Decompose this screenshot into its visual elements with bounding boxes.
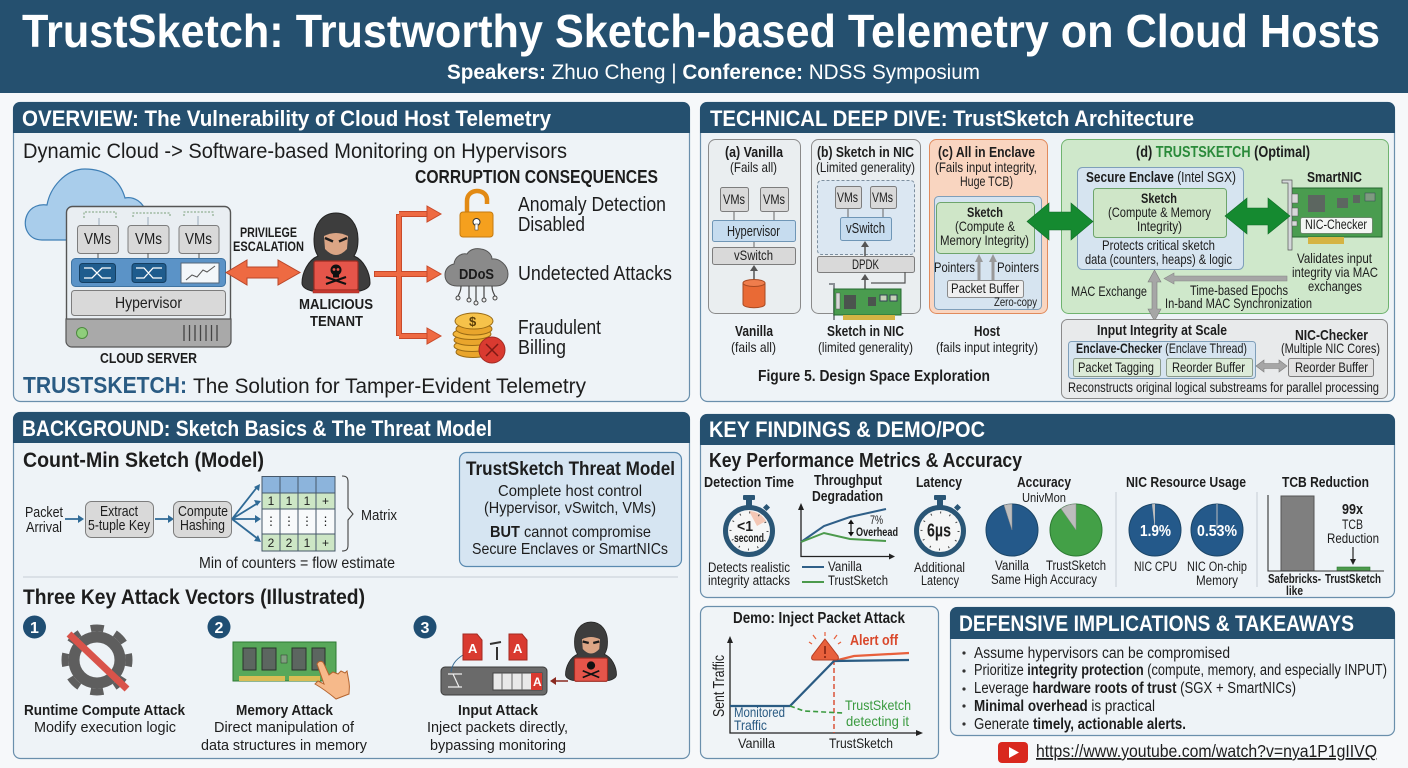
icon: stopwatch: <1 [737, 518, 753, 535]
panel: demo [700, 606, 938, 758]
icon: alert triangle [809, 632, 841, 660]
design (b) sketch in NIC: VMs [872, 190, 893, 205]
icon: packet injection [441, 634, 568, 695]
icon: youtube play [998, 742, 1028, 763]
text: solution statement [23, 372, 586, 398]
icon: DDoS cloud [445, 249, 508, 305]
flow diagram: count-min sketch [25, 484, 261, 542]
labels: MAC exchange and epochs [1071, 282, 1312, 311]
matrix: ⋮ [283, 514, 295, 528]
input integrity at scale: Reorder Buffer [1172, 359, 1245, 375]
line chart: sent traffic: Vanilla [738, 735, 775, 751]
label: privilege escalation: ESCALATION [233, 239, 304, 254]
figure caption: Figure 5. Design Space Exploration [758, 368, 990, 385]
flow diagram: count-min sketch: Extract [100, 503, 139, 520]
secure enclave: data (counters, heaps) & logic [1085, 251, 1232, 267]
matrix: 2 [268, 536, 275, 550]
design (c) all in enclave: (c) All in Enclave [938, 144, 1035, 161]
icon: stopwatch: second [734, 533, 764, 545]
design (c) all in enclave: Zero-copy [994, 295, 1037, 309]
line chart: 7% [870, 513, 883, 527]
callout: threat model: TrustSketch Threat Model [466, 459, 675, 480]
bullet list [962, 645, 1387, 733]
matrix: ⋮ [301, 514, 313, 528]
metric: detection time: integrity attacks [708, 573, 790, 588]
input integrity at scale: (Multiple NIC Cores) [1281, 340, 1380, 356]
metric: latency: Latency [921, 573, 959, 588]
secure enclave: (Compute & Memory [1108, 204, 1211, 220]
bullet list: Leverage hardware roots of trust (SGX + SmartNICs) [974, 680, 1296, 697]
design (a) vanilla: VMs [723, 191, 745, 207]
arrow: epoch sync [1164, 273, 1287, 284]
callout: threat model: Secure Enclaves or SmartNICs [472, 541, 668, 558]
icon: stopwatch [726, 495, 772, 554]
labels under design panels: (fails input integrity) [936, 339, 1038, 355]
callout: threat model [460, 452, 682, 566]
metric: accuracy [986, 475, 1106, 587]
design (c) all in enclave: Memory Integrity) [940, 232, 1029, 248]
text: undetected attacks: Undetected Attacks [518, 263, 672, 285]
line chart: sent traffic: TrustSketch [829, 735, 893, 751]
matrix: ⋮ [320, 514, 332, 528]
SmartNIC: Validates input [1297, 250, 1372, 266]
design (a) vanilla [708, 140, 800, 314]
label: privilege escalation: PRIVILEGE [240, 225, 297, 240]
design (a) vanilla: (a) Vanilla [725, 144, 784, 161]
attack 3: input: Input Attack [458, 702, 539, 719]
metric: TCB reduction: TCB Reduction [1282, 475, 1369, 491]
VM boxes: VMs [185, 231, 212, 248]
attack 3: input: 3 [421, 620, 430, 637]
flow diagram: count-min sketch: Packet [25, 504, 64, 521]
line chart: sent traffic: Monitored [734, 704, 785, 720]
input integrity at scale [1062, 320, 1388, 398]
metric: accuracy: Vanilla [995, 558, 1029, 573]
icon: coins with red cross [453, 313, 505, 363]
label: cloud server: CLOUD SERVER [100, 351, 197, 367]
pie: trustsketch [1050, 504, 1102, 556]
text: fraudulent billing: Fraudulent [518, 317, 601, 339]
labels under design panels: Host [974, 323, 1000, 340]
icon: cloud [25, 169, 146, 240]
design (a) vanilla: Hypervisor [727, 224, 780, 240]
icon: broken gear [65, 628, 129, 692]
text: anomaly detection disabled: Disabled [518, 214, 585, 236]
metric: TCB reduction: TCB [1342, 517, 1363, 532]
label: malicious tenant: MALICIOUS [299, 297, 373, 313]
label: alert off: Alert off [850, 632, 899, 649]
text: solution statement: TRUSTSKETCH: [23, 372, 187, 398]
attack 1: runtime compute: Modify execution logic [34, 719, 176, 736]
attack 2: memory [201, 616, 367, 754]
metric: NIC resource usage: Memory [1196, 573, 1238, 588]
input integrity at scale: Reorder Buffer [1295, 359, 1368, 375]
icon: packet injection: A [468, 641, 478, 656]
flow diagram: count-min sketch: 5-tuple Key [88, 517, 150, 534]
arrow: MAC exchange double arrow [1148, 270, 1161, 321]
line chart: sent traffic: TrustSketch [845, 697, 911, 713]
matrix: 1 [286, 494, 293, 508]
text: fraudulent billing [518, 317, 601, 359]
design (c) all in enclave: Pointers [997, 259, 1039, 275]
heading: corruption consequences: CORRUPTION CONSEQUENCES [415, 167, 658, 187]
icon: open lock [460, 191, 493, 237]
metric: NIC resource usage: NIC CPU [1134, 559, 1177, 574]
icon: packet injection: A [513, 641, 523, 656]
line chart: Overhead [856, 525, 898, 539]
subheading: metrics: Key Performance Metrics & Accuracy [709, 450, 1023, 472]
label: matrix bracket [342, 476, 397, 551]
label: privilege escalation [233, 225, 304, 254]
labels under design panels [731, 323, 1038, 355]
secure enclave: Protects critical sketch [1102, 237, 1215, 253]
flow diagram: count-min sketch: Arrival [26, 519, 62, 536]
youtube link [998, 741, 1377, 763]
line chart: sent traffic [711, 636, 923, 751]
cloud server [66, 206, 231, 347]
labels under design panels: Sketch in NIC [827, 323, 904, 340]
design (b) sketch in NIC: (Limited generality) [816, 159, 915, 175]
matrix: 1 [304, 494, 311, 508]
legend: TrustSketch [828, 573, 888, 588]
label: matrix bracket: Matrix [361, 507, 397, 524]
hypervisor: Hypervisor [115, 295, 183, 312]
metric: latency: Additional [914, 560, 965, 575]
attack 1: runtime compute: 1 [30, 620, 39, 637]
subheading: dynamic cloud: Dynamic Cloud -> Software-based Monitoring on Hypervisors [23, 140, 567, 163]
matrix: 1 [304, 536, 311, 550]
line chart: sent traffic: detecting it [846, 713, 909, 729]
legend [802, 559, 888, 588]
panel: overview [13, 102, 690, 402]
icon: DDoS cloud: DDoS [459, 266, 494, 283]
metric: throughput degradation [798, 473, 898, 588]
design (c) all in enclave: (Fails input integrity, [935, 159, 1037, 175]
matrix: 1 [268, 494, 275, 508]
metric: throughput degradation: Degradation [812, 489, 883, 505]
labels: MAC exchange and epochs: Time-based Epochs [1190, 282, 1288, 298]
input integrity at scale: Enclave-Checker (Enclave Thread) [1076, 340, 1247, 356]
attack 2: memory: data structures in memory [201, 737, 367, 754]
matrix: + [322, 536, 329, 550]
secure enclave [1078, 168, 1244, 270]
SmartNIC: SmartNIC [1307, 169, 1362, 186]
metric: TCB reduction [1268, 475, 1384, 598]
hypervisor [72, 290, 226, 316]
icon: RAM stick and hand [233, 642, 349, 699]
VM boxes: VMs [135, 231, 162, 248]
metric: accuracy: TrustSketch [1046, 558, 1106, 573]
bullet list: Generate timely, actionable alerts. [974, 716, 1186, 733]
label: malicious tenant: TENANT [310, 314, 363, 330]
design (b) sketch in NIC: DPDK [852, 256, 879, 272]
design (b) sketch in NIC [812, 140, 920, 320]
SmartNIC [1282, 169, 1382, 294]
labels under design panels: (fails all) [731, 339, 776, 355]
SmartNIC: exchanges [1308, 278, 1362, 294]
labels under design panels: Vanilla [735, 323, 774, 340]
metric: TCB reduction: like [1286, 584, 1303, 598]
secure enclave: Integrity) [1137, 218, 1182, 234]
SmartNIC: integrity via MAC [1292, 264, 1378, 280]
design (a) vanilla: (Fails all) [730, 159, 777, 175]
subheading: count-min sketch: Count-Min Sketch (Model) [23, 449, 264, 472]
matrix: 2 [286, 536, 293, 550]
metric: latency: Latency [916, 475, 962, 491]
callout: threat model: Complete host control [498, 483, 642, 500]
text: anomaly detection disabled [518, 194, 666, 236]
matrix: ⋮ [265, 514, 277, 528]
legend: Vanilla [828, 559, 862, 574]
matrix: + [322, 494, 329, 508]
input integrity at scale: Packet Tagging [1078, 359, 1154, 375]
text: solution statement: The Solution for Tamper-Evident Telemetry [193, 374, 586, 398]
VM boxes [78, 226, 219, 254]
line chart: sent traffic: Sent Traffic [711, 655, 728, 717]
design (d) trustsketch [1062, 140, 1388, 314]
secure enclave: Secure Enclave (Intel SGX) [1086, 169, 1236, 186]
flow diagram: count-min sketch: Compute [178, 503, 228, 520]
icon: NIC card [829, 283, 901, 320]
metric: throughput degradation: Throughput [814, 473, 882, 489]
matrix [262, 476, 335, 551]
metric: accuracy: Accuracy [1017, 475, 1071, 491]
icon: coins with red cross: $ [469, 314, 477, 329]
icon: stopwatch: 6µs [927, 520, 951, 540]
design (c) all in enclave: Huge TCB) [960, 173, 1013, 189]
design (c) all in enclave: Sketch [967, 204, 1003, 220]
metric: detection time [704, 475, 794, 588]
secure enclave: Sketch [1141, 190, 1177, 206]
panel: defensive implications [950, 607, 1395, 736]
label: malicious tenant [299, 297, 373, 330]
panel: background [13, 412, 690, 758]
bullet list: Assume hypervisors can be compromised [974, 645, 1230, 662]
arrow: privilege escalation double arrow [226, 260, 300, 285]
pie: NIC CPU: 1.9% [1140, 523, 1171, 540]
design (b) sketch in NIC: (b) Sketch in NIC [817, 144, 914, 161]
url: https://www.youtube.com/watch?v=nya1P1gIIVQ [1036, 741, 1377, 761]
metric: TCB reduction: 99x [1342, 501, 1364, 518]
pie: vanilla [986, 504, 1038, 556]
line chart: sent traffic: Traffic [734, 717, 767, 733]
attack 2: memory: Direct manipulation of [214, 719, 355, 736]
text: fraudulent billing: Billing [518, 337, 566, 359]
attack 3: input [414, 616, 616, 754]
icon: packet injection: A [533, 675, 542, 689]
attack 1: runtime compute: Runtime Compute Attack [24, 702, 186, 719]
metric: NIC resource usage: NIC On-chip [1187, 559, 1247, 574]
design (a) vanilla: vSwitch [734, 247, 773, 263]
metric: NIC resource usage [1126, 475, 1247, 588]
speakers and conference: Speakers: Zhuo Cheng | Conference: NDSS Symposium [447, 61, 980, 84]
metric: TCB reduction: TrustSketch [1325, 572, 1381, 586]
design (c) all in enclave: Packet Buffer [951, 280, 1019, 296]
design (b) sketch in NIC: VMs [837, 190, 858, 205]
subheading: attack vectors: Three Key Attack Vectors (Illustrated) [23, 586, 365, 609]
attack 3: input: bypassing monitoring [430, 737, 566, 754]
bullet list: Minimal overhead is practical [974, 698, 1155, 715]
callout: threat model: (Hypervisor, vSwitch, VMs) [484, 500, 656, 517]
design (a) vanilla: VMs [763, 191, 785, 207]
arrow: consequence tree [374, 206, 441, 344]
heading: defensive implications: DEFENSIVE IMPLICATIONS & TAKEAWAYS [959, 611, 1354, 636]
arrow: enclave to trustsketch [1027, 203, 1093, 240]
VM boxes: VMs [84, 231, 111, 248]
pie: NIC memory: 0.53% [1197, 523, 1237, 540]
design (c) all in enclave: Pointers [934, 259, 975, 275]
metric: accuracy: UnivMon [1022, 490, 1066, 505]
heading: key findings: KEY FINDINGS & DEMO/POC [709, 417, 985, 442]
caption: min of counters: Min of counters = flow estimate [199, 555, 395, 572]
design (c) all in enclave [930, 140, 1048, 314]
icon: attacker [566, 622, 616, 681]
arrow: enclave to SmartNIC [1225, 198, 1290, 234]
text: anomaly detection disabled: Anomaly Detection [518, 194, 666, 216]
heading: technical deep dive: TECHNICAL DEEP DIVE: TrustSketch Architecture [710, 106, 1194, 131]
metric: NIC resource usage: NIC Resource Usage [1126, 475, 1246, 491]
design (d) trustsketch: (d) TRUSTSKETCH (Optimal) [1136, 144, 1310, 161]
metric: detection time: Detects realistic [708, 560, 790, 575]
metric: TCB reduction: Safebricks- [1268, 572, 1321, 586]
attack 2: memory: 2 [215, 620, 224, 637]
labels under design panels: (limited generality) [818, 339, 913, 355]
design (b) sketch in NIC: vSwitch [846, 221, 885, 237]
labels: MAC exchange and epochs: In-band MAC Synchronization [1165, 295, 1312, 311]
title banner [0, 0, 1408, 93]
labels: MAC exchange and epochs: MAC Exchange [1071, 283, 1147, 299]
input integrity at scale: NIC-Checker [1295, 327, 1368, 344]
SmartNIC: NIC-Checker [1305, 217, 1367, 232]
attack 2: memory: Memory Attack [236, 702, 334, 719]
line chart [798, 503, 898, 560]
attack 1: runtime compute [23, 616, 186, 736]
metric: TCB reduction: Reduction [1327, 531, 1379, 546]
metric: latency [914, 475, 965, 588]
flow diagram: count-min sketch: Hashing [180, 517, 225, 534]
panel: technical deep dive [700, 102, 1395, 402]
icon: malicious tenant hacker [302, 213, 370, 293]
panel: key findings [700, 414, 1395, 598]
heading: demo: Demo: Inject Packet Attack [733, 610, 905, 627]
metric: accuracy: Same High Accuracy [991, 572, 1097, 587]
metric: detection time: Detection Time [704, 475, 794, 491]
virtual switch strip [72, 258, 226, 286]
callout: threat model: BUT cannot compromise [490, 524, 651, 541]
attack 3: input: Inject packets directly, [427, 719, 568, 736]
design (c) all in enclave: (Compute & [955, 218, 1016, 234]
input integrity at scale: Input Integrity at Scale [1097, 322, 1227, 339]
heading: background: BACKGROUND: Sketch Basics & The Threat Model [22, 416, 492, 441]
heading: overview: OVERVIEW: The Vulnerability of Cloud Host Telemetry [22, 106, 552, 131]
